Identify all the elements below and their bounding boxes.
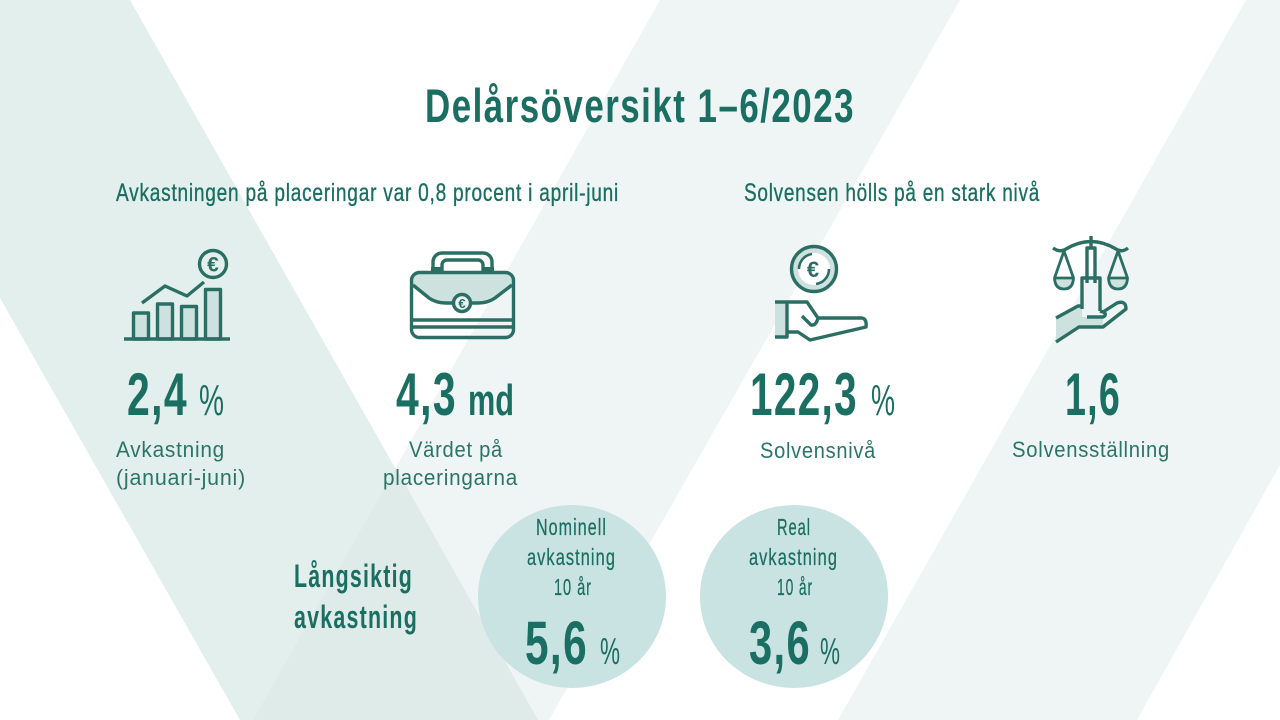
- metric: value of investments: 4,3: [396, 361, 457, 428]
- circle: nominal return 10 years: Nominell: [536, 514, 607, 540]
- heading: solvency: Solvensen hölls på en stark nivå: [744, 179, 1040, 207]
- icon: bar chart with euro coin: €: [207, 254, 219, 276]
- heading: long-term return: avkastning: [294, 599, 418, 635]
- circle: real return 10 years: 3,6: [749, 609, 811, 677]
- metric: solvency position: 1,6: [1065, 361, 1121, 428]
- metric: solvency level: Solvensnivå: [760, 438, 876, 463]
- circle: nominal return 10 years: 10 år: [554, 574, 592, 600]
- metric: return January-June: 2,4: [127, 361, 188, 428]
- metric: return January-June: Avkastning: [116, 437, 225, 462]
- metric: return January-June: (januari-juni): [116, 465, 246, 490]
- icon: hand with coin: [775, 246, 866, 340]
- circle: real return 10 years: avkastning: [749, 544, 838, 570]
- metric: solvency position: [1012, 361, 1170, 462]
- metric: solvency position: Solvensställning: [1012, 437, 1170, 462]
- icon: scales on a hand: [1053, 236, 1128, 342]
- icon: bar chart with euro coin: [124, 250, 230, 339]
- circle: nominal return 10 years: 5,6: [525, 609, 588, 677]
- metric: return January-June: [116, 361, 246, 490]
- circle: real return 10 years: [700, 505, 888, 688]
- circle: real return 10 years: %: [820, 631, 840, 672]
- heading: long-term return: [294, 558, 418, 635]
- circle: nominal return 10 years: %: [600, 631, 620, 672]
- circle: real return 10 years: 10 år: [777, 574, 813, 600]
- circle: nominal return 10 years: avkastning: [527, 544, 616, 570]
- metric: value of investments: Värdet på: [409, 437, 503, 462]
- metric: solvency level: [750, 361, 895, 463]
- metric: value of investments: placeringarna: [383, 465, 518, 490]
- metric: solvency level: %: [871, 376, 895, 425]
- title: Delårsöversikt 1–6/2023: [425, 79, 855, 132]
- metric: value of investments: md: [468, 376, 514, 425]
- heading: long-term return: Långsiktig: [294, 558, 413, 594]
- metric: solvency level: 122,3: [750, 361, 858, 428]
- circle: nominal return 10 years: [478, 505, 666, 688]
- icon: hand with coin: €: [807, 257, 819, 282]
- metric: value of investments: [383, 361, 518, 490]
- icon: briefcase: [412, 253, 514, 338]
- circle: real return 10 years: Real: [777, 514, 811, 540]
- heading: returns: Avkastningen på placeringar var 0,8 procent i april-juni: [116, 179, 619, 207]
- icon: briefcase: €: [458, 296, 466, 311]
- metric: return January-June: %: [199, 376, 224, 425]
